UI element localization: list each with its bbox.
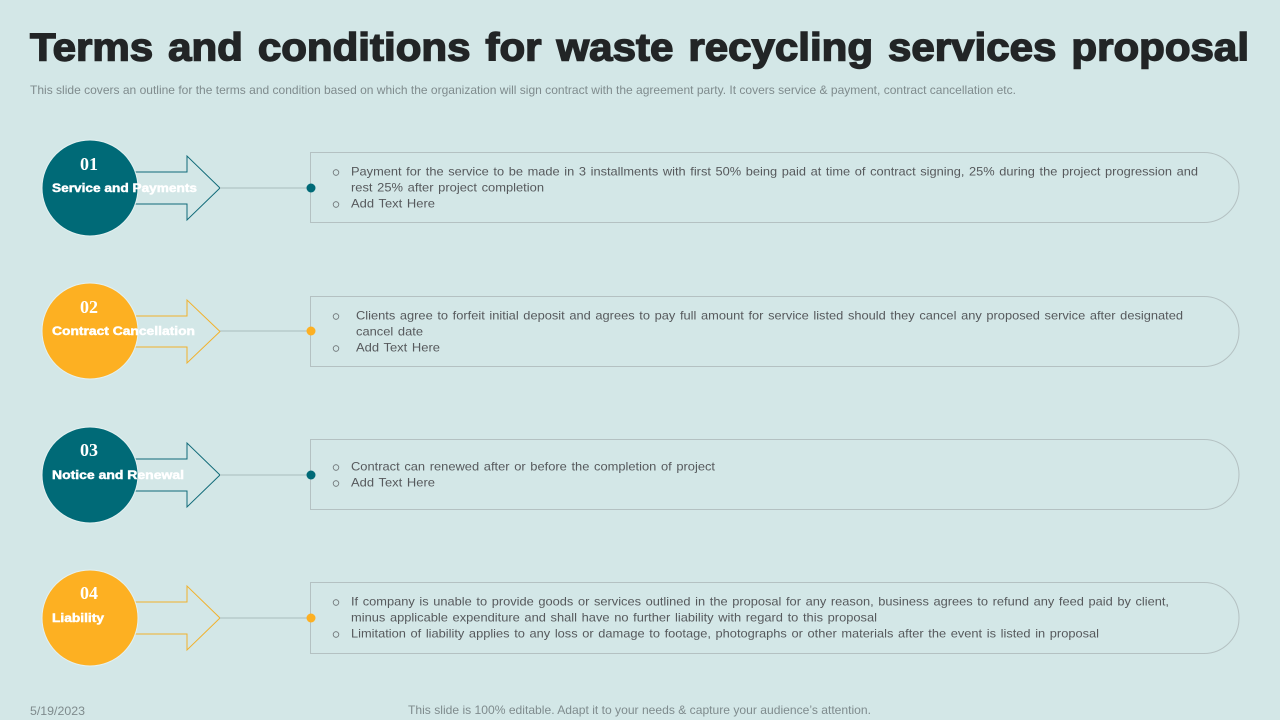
dot: notice and renewal: [306, 470, 316, 480]
panel: contract cancellation: [42, 283, 1239, 379]
number 01: 01: [80, 154, 98, 174]
circle: liability: [42, 570, 138, 666]
dot: service and payments: [306, 184, 316, 192]
connector: contract cancellation: [220, 330, 310, 332]
body text: notice and renewal: [333, 459, 716, 489]
body text: service and payments: Add Text Here: [351, 196, 435, 210]
circle: service and payments: [42, 140, 138, 236]
label: liability: Liability: [52, 613, 105, 625]
label: notice and renewal: Notice and Renewal: [52, 470, 184, 482]
body text: contract cancellation: [333, 308, 1183, 354]
panel: service and payments: [42, 140, 1239, 236]
footer note: This slide is 100% editable. Adapt it to your needs & capture your audience’s attention.: [408, 703, 871, 717]
connector: service and payments: [220, 187, 310, 189]
panel: notice and renewal: [42, 427, 1239, 523]
text box: liability: [310, 582, 1239, 654]
text box: notice and renewal: [310, 440, 1239, 510]
dot: contract cancellation: [306, 326, 316, 336]
connector: liability: [220, 617, 310, 619]
arrow: contract cancellation: [130, 300, 220, 363]
body text: service and payments: [333, 164, 1198, 210]
number 04: 04: [80, 583, 98, 603]
number 02: 02: [80, 297, 98, 317]
subtitle: This slide covers an outline for the terms and condition based on which the organization will sign contract with the agreement party. It covers service & payment, contract cancellation etc.: [30, 83, 1016, 97]
text box: contract cancellation: [310, 296, 1239, 366]
panel: liability: [42, 570, 1239, 666]
body text: liability: Limitation of liability applies to any loss or damage to footage, photographs or other materials after the event is listed in proposal: [351, 626, 1099, 640]
body text: service and payments: Payment for the service to be made in 3 installments with first 50% being paid at time of contract signing, 25% during the project progression and: [351, 164, 1198, 178]
body text: contract cancellation: Add Text Here: [356, 340, 440, 354]
date: 5/19/2023: [30, 704, 85, 718]
number 03: 03: [80, 440, 98, 460]
arrow: service and payments: [130, 156, 220, 220]
body text: notice and renewal: Add Text Here: [351, 475, 435, 489]
title: Terms and conditions for waste recycling services proposal: [30, 26, 1249, 70]
arrow: notice and renewal: [130, 443, 220, 507]
connector: notice and renewal: [220, 474, 310, 476]
text box: service and payments: [310, 152, 1239, 222]
dot: liability: [306, 614, 316, 622]
body text: notice and renewal: Contract can renewed after or before the completion of project: [351, 459, 716, 473]
body text: contract cancellation: Clients agree to forfeit initial deposit and agrees to pay full amount for service listed should they cancel any proposed service after designated: [356, 308, 1183, 322]
body text: contract cancellation: cancel date: [356, 324, 423, 338]
label: contract cancellation: Contract Cancellation: [52, 326, 195, 338]
body text: liability: If company is unable to provide goods or services outlined in the proposal for any reason, business agrees to refund any feed paid by client,: [351, 594, 1169, 608]
arrow: liability: [130, 586, 220, 650]
body text: service and payments: rest 25% after project completion: [351, 180, 544, 194]
label: service and payments: Service and Payments: [52, 183, 197, 195]
circle: contract cancellation: [42, 283, 138, 379]
circle: notice and renewal: [42, 427, 138, 523]
body text: liability: [333, 594, 1169, 640]
body text: liability: minus applicable expenditure and shall have no further liability with regard to this proposal: [351, 610, 877, 624]
